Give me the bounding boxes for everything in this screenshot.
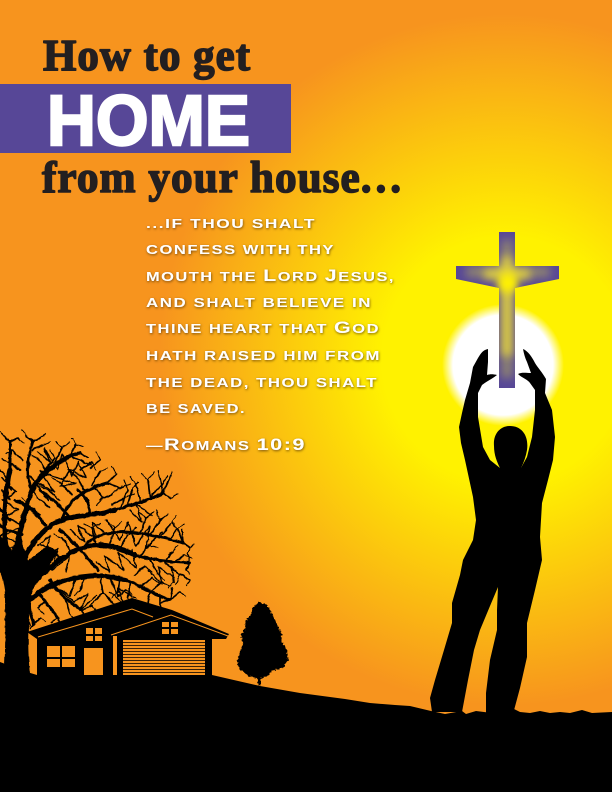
icon: glowing cross [456, 232, 559, 388]
scripture text block: THE DEAD, THOU SHALT [146, 375, 378, 390]
scripture text block: MOUTH THE LORD JESUS, [146, 266, 395, 285]
person silhouette with raised arms [430, 349, 555, 714]
title: from your house...: from your house... [42, 153, 405, 202]
scripture text block: HATH RAISED HIM FROM [146, 348, 381, 363]
scripture text block: ...IF THOU SHALT [146, 216, 316, 231]
tree: large bare oak silhouette [0, 430, 194, 675]
roof highlight lines [38, 609, 228, 637]
scripture text block: AND SHALT BELIEVE IN [146, 295, 372, 310]
title banner: HOME: HOME [47, 82, 250, 161]
white sun halo [442, 304, 564, 426]
window: left [47, 646, 75, 667]
house [27, 598, 229, 676]
house silhouette [27, 598, 229, 676]
window: upper [86, 628, 102, 641]
garage door [123, 640, 205, 675]
scripture text block: THINE HEART THAT G OD [146, 318, 380, 337]
door [84, 648, 103, 675]
scripture text block: CONFESS WITH THY [146, 242, 335, 257]
scripture text block: —R OMANS 10:9 [146, 435, 306, 454]
scripture text block [146, 216, 395, 454]
tree: small evergreen [237, 602, 288, 685]
title: How to get: How to get [43, 31, 251, 80]
ground silhouette [0, 662, 612, 792]
porch post [113, 636, 117, 675]
window: garage gable [162, 622, 178, 634]
scripture text block: BE SAVED. [146, 401, 246, 416]
